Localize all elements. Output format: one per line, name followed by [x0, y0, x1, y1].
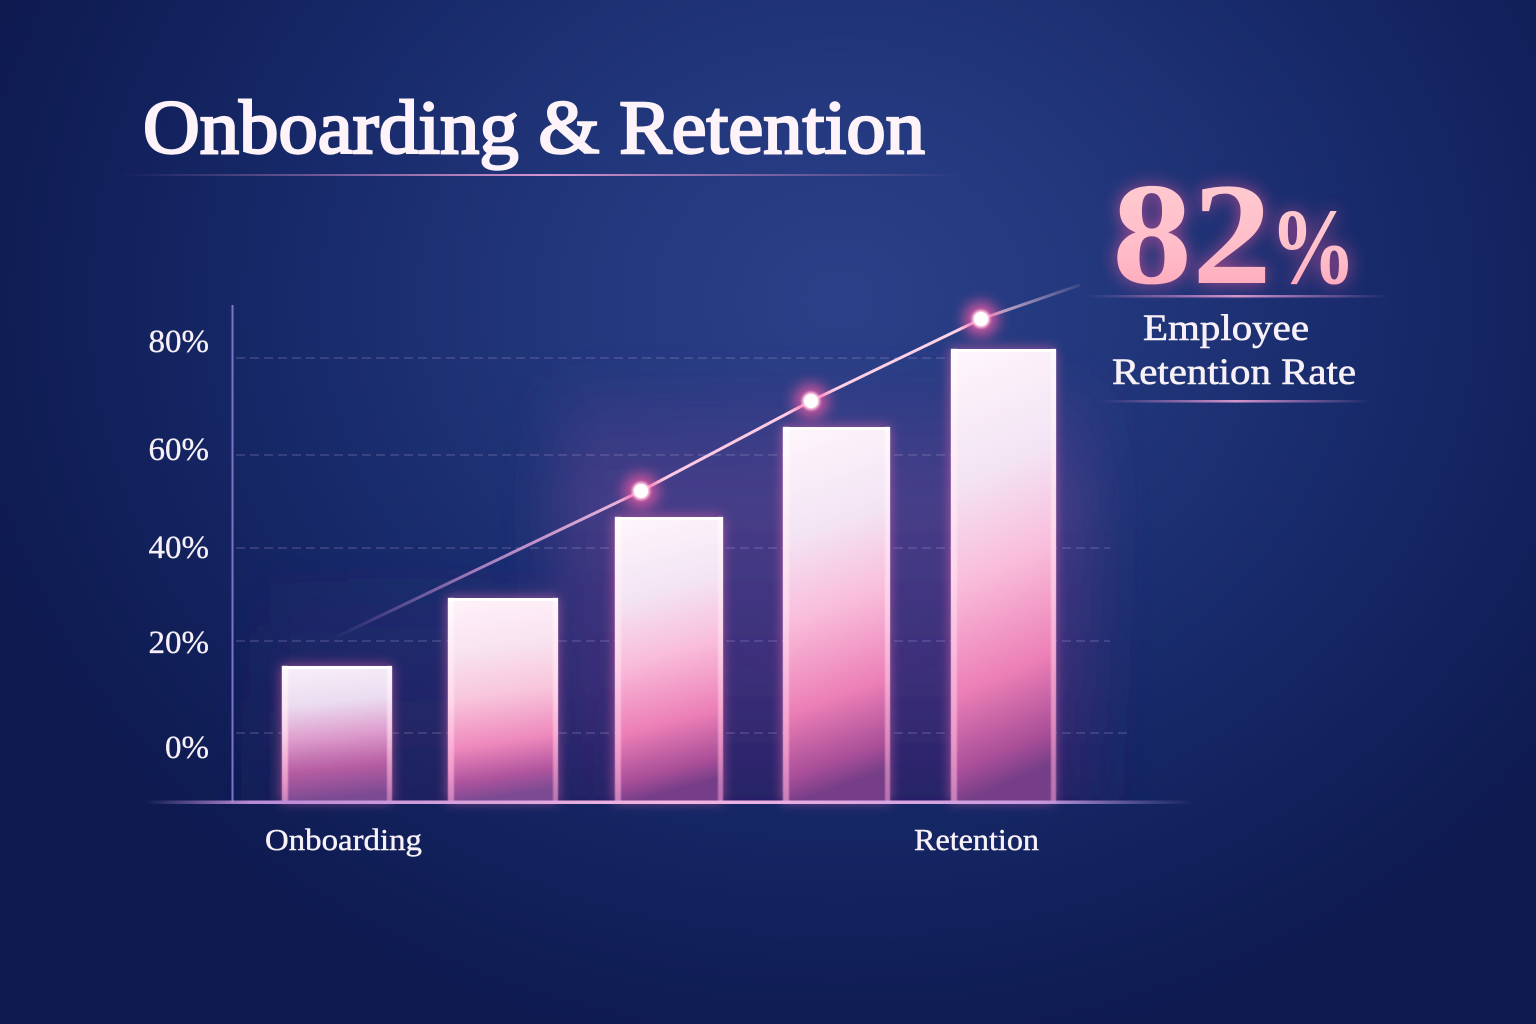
y axis labels: 60% — [148, 432, 209, 468]
y axis labels: 20% — [148, 625, 209, 661]
data point 3 — [964, 302, 998, 336]
callout lower rule — [1100, 400, 1372, 402]
y axis labels: 80% — [148, 324, 209, 360]
x axis — [145, 800, 1195, 804]
callout label — [1112, 308, 1356, 393]
title: Onboarding & Retention — [143, 86, 925, 170]
x label: onboarding: Onboarding — [265, 822, 422, 857]
y axis labels — [148, 324, 209, 766]
big number: 82 — [1112, 153, 1272, 315]
callout: 82% employee retention rate — [1085, 153, 1390, 402]
data point 1 — [624, 474, 658, 508]
y axis labels: 40% — [148, 530, 209, 566]
big number glow — [1112, 153, 1356, 315]
trend line — [330, 285, 1080, 640]
callout label: Employee — [1143, 308, 1309, 349]
y axis — [232, 305, 234, 803]
bar 4 — [783, 427, 890, 803]
big number glow: % — [1270, 188, 1356, 307]
y axis labels: 0% — [165, 730, 209, 766]
callout label: Retention Rate — [1112, 352, 1356, 393]
bar 1 — [282, 666, 392, 803]
bar glows — [281, 348, 1055, 802]
x label: retention: Retention — [914, 822, 1040, 857]
bar 3 — [615, 517, 723, 803]
data point 2 — [794, 384, 828, 418]
bar 2 — [448, 598, 558, 803]
title underline — [120, 174, 965, 176]
big number glow: 82 — [1112, 153, 1272, 315]
bar 5 — [951, 349, 1056, 803]
chart — [145, 285, 1195, 857]
gridlines — [236, 358, 1130, 733]
plot haze — [270, 389, 1114, 800]
big number: % — [1270, 188, 1356, 307]
big number — [1112, 153, 1356, 315]
callout upper rule — [1085, 295, 1390, 298]
